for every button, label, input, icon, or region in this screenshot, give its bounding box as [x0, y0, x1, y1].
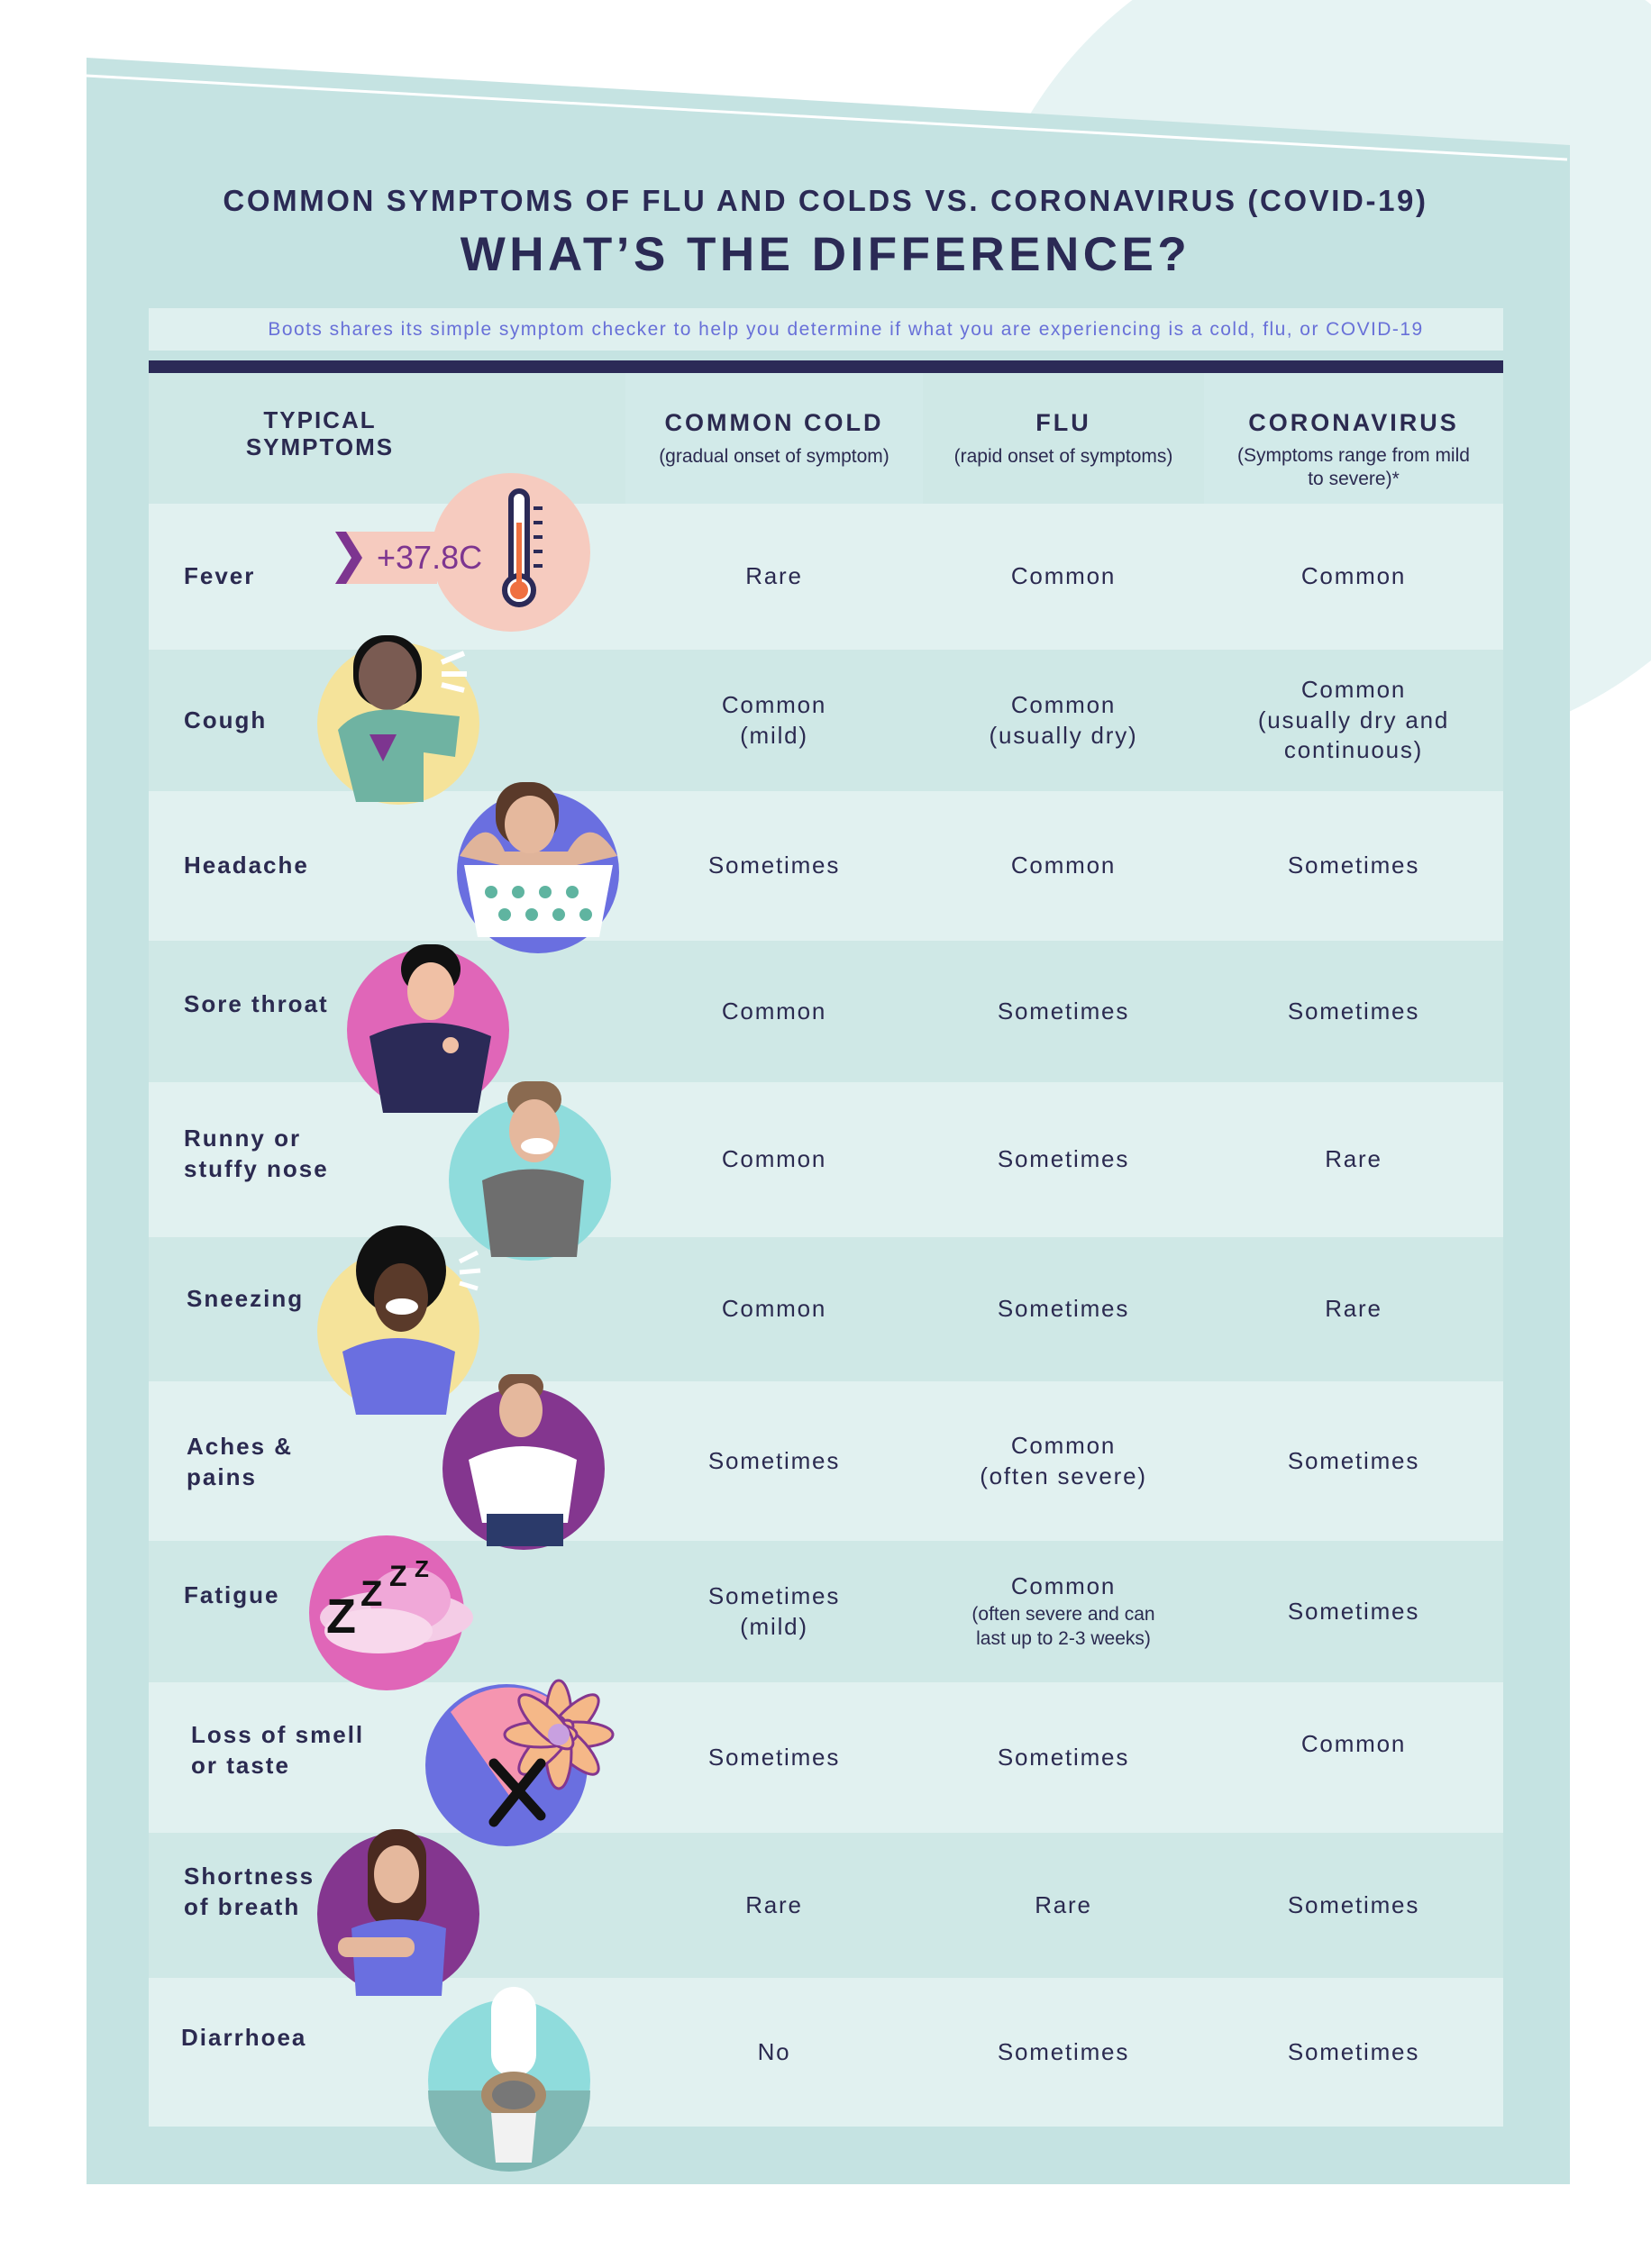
icon: sneezing person: [317, 1225, 480, 1415]
header row: (rapid onset of symptoms): [954, 446, 1172, 467]
header row: CORONAVIRUS: [1248, 409, 1459, 436]
row: cough: (mild): [740, 721, 808, 748]
row: headache: [149, 791, 1503, 941]
row: fatigue: Common: [1011, 1572, 1116, 1599]
header row: FLU: [1035, 409, 1091, 436]
icon: shortness of breath person: [317, 1829, 479, 1996]
icon: headache person: [457, 782, 619, 953]
row: aches: Sometimes: [1288, 1447, 1419, 1474]
subtitle bar: [149, 308, 1503, 351]
row: fever: [149, 504, 1503, 650]
row: diarrhoea: Diarrhoea: [181, 2024, 306, 2051]
icon: toilet: [428, 1987, 590, 2172]
icon: thermometer +37.8C: [335, 473, 590, 632]
row: shortness of breath: [149, 1833, 1503, 1978]
row: fatigue: last up to 2-3 weeks): [976, 1628, 1151, 1649]
row: fever: Rare: [745, 562, 803, 589]
header row: COMMON COLD: [665, 409, 883, 436]
row: runny nose: stuffy nose: [184, 1155, 329, 1182]
icon: loss of smell flower: [425, 1681, 613, 1846]
icon: fatigue zzz: Z: [415, 1555, 429, 1582]
row: fatigue: [149, 1541, 1503, 1682]
header row: to severe)*: [1308, 469, 1400, 489]
row: shortness of breath: Rare: [1035, 1891, 1092, 1918]
header row: TYPICAL: [263, 406, 377, 433]
row: aches: [149, 1381, 1503, 1541]
header row: (gradual onset of symptom): [659, 446, 889, 467]
row: diarrhoea: Sometimes: [1288, 2038, 1419, 2065]
row: sneezing: Sneezing: [187, 1285, 304, 1312]
row: fatigue: Sometimes: [1288, 1598, 1419, 1625]
navy bar: [149, 360, 1503, 373]
row: fatigue: Sometimes: [708, 1582, 840, 1609]
row: runny nose: Rare: [1325, 1145, 1382, 1172]
row: cough: (usually dry): [990, 721, 1137, 748]
row: cough: Common: [1011, 691, 1116, 718]
row: loss of smell: Common: [1301, 1730, 1406, 1757]
row: sneezing: Sometimes: [998, 1295, 1129, 1322]
row: sneezing: Rare: [1325, 1295, 1382, 1322]
row: fever: Fever: [184, 562, 255, 589]
icon: fatigue zzz: Z: [360, 1574, 382, 1614]
row: diarrhoea: No: [758, 2038, 790, 2065]
row: aches: pains: [187, 1463, 257, 1490]
row: headache: Sometimes: [708, 852, 840, 879]
row: runny nose: [149, 1082, 1503, 1237]
subtitle bar: Boots shares its simple symptom checker to help you determine if what you are experiencing is a cold, flu, or COVID-19: [268, 319, 1424, 339]
row: sneezing: [149, 1237, 1503, 1381]
row: loss of smell: [149, 1682, 1503, 1833]
row: sore throat: Sometimes: [1288, 997, 1419, 1025]
row: cough: (usually dry and: [1258, 706, 1449, 733]
row: headache: Headache: [184, 852, 309, 879]
row: cough: Common: [1301, 676, 1406, 703]
row: diarrhoea: Sometimes: [998, 2038, 1129, 2065]
row: sneezing: Common: [722, 1295, 826, 1322]
row: loss of smell: Sometimes: [998, 1744, 1129, 1771]
row: aches: (often severe): [980, 1462, 1147, 1489]
row: shortness of breath: Rare: [745, 1891, 803, 1918]
row: sore throat: Sometimes: [998, 997, 1129, 1025]
icon: cough person: [317, 635, 479, 805]
row: headache: Sometimes: [1288, 852, 1419, 879]
row: sore throat: [149, 941, 1503, 1082]
icon: fatigue zzz: Z: [389, 1560, 407, 1592]
row: loss of smell: or taste: [191, 1752, 290, 1779]
header row: SYMPTOMS: [246, 433, 394, 460]
row: shortness of breath: of breath: [184, 1893, 300, 1920]
row: fatigue: Fatigue: [184, 1581, 279, 1608]
row: shortness of breath: Shortness: [184, 1863, 315, 1890]
row: fever: Common: [1011, 562, 1116, 589]
row: fatigue: (mild): [740, 1613, 808, 1640]
row: aches: Sometimes: [708, 1447, 840, 1474]
row: cough: continuous): [1284, 736, 1423, 763]
icon: fatigue zzz: Z: [326, 1589, 356, 1644]
icon: fatigue zzz: [309, 1535, 473, 1690]
row: runny nose: Runny or: [184, 1125, 301, 1152]
title: WHAT’S THE DIFFERENCE?: [461, 228, 1190, 281]
row: loss of smell: Sometimes: [708, 1744, 840, 1771]
row: fatigue: (often severe and can: [971, 1604, 1155, 1625]
row: fever: Common: [1301, 562, 1406, 589]
icon: sore throat person: [347, 944, 509, 1113]
row: aches: Aches &: [187, 1433, 293, 1460]
icon: thermometer +37.8C: +37.8C: [377, 539, 482, 576]
row: sore throat: Sore throat: [184, 990, 329, 1017]
row: shortness of breath: Sometimes: [1288, 1891, 1419, 1918]
title: [223, 184, 1428, 281]
row: sore throat: Common: [722, 997, 826, 1025]
row: diarrhoea: [149, 1978, 1503, 2127]
row: headache: Common: [1011, 852, 1116, 879]
row: cough: [149, 650, 1503, 791]
row: runny nose: Sometimes: [998, 1145, 1129, 1172]
row: loss of smell: Loss of smell: [191, 1721, 364, 1748]
row: cough: Common: [722, 691, 826, 718]
header row: [149, 373, 1503, 504]
title: COMMON SYMPTOMS OF FLU AND COLDS VS. CORONAVIRUS (COVID-19): [223, 184, 1428, 217]
row: runny nose: Common: [722, 1145, 826, 1172]
icon: runny nose person: [449, 1081, 611, 1261]
icon: aches person: [442, 1374, 605, 1550]
row: cough: Cough: [184, 706, 267, 733]
header row: (Symptoms range from mild: [1237, 445, 1470, 466]
row: aches: Common: [1011, 1432, 1116, 1459]
